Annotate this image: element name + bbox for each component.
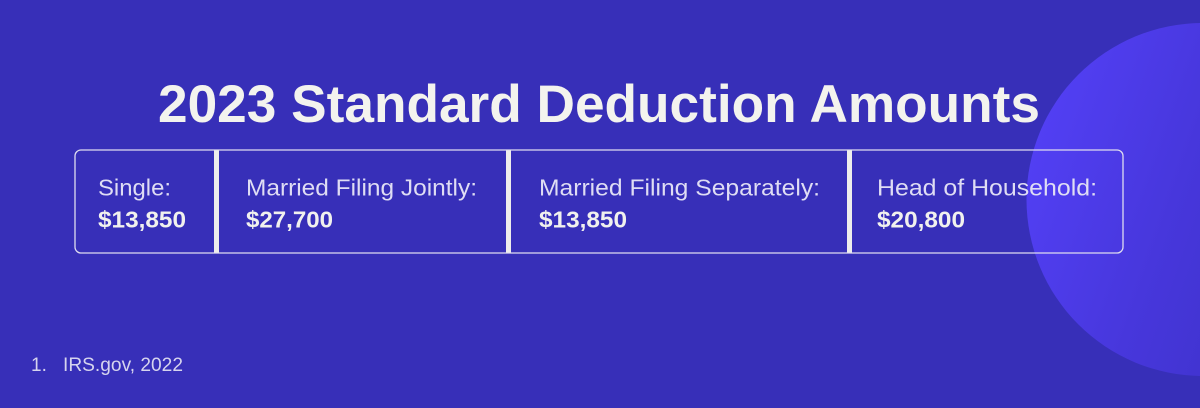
cell: head of household: Head of Household:: [877, 174, 1097, 200]
cell: married filing jointly: $27,700: [246, 206, 333, 232]
table outline: [75, 150, 1123, 253]
footnote: 1.: [31, 355, 47, 376]
cell: head of household: [877, 174, 1097, 232]
cell: single: [98, 174, 186, 232]
cell: single: $13,850: [98, 206, 186, 232]
footnote: IRS.gov, 2022: [63, 355, 183, 376]
cell: married filing jointly: Married Filing Jointly:: [246, 174, 477, 200]
panel: deduction table: [75, 150, 1123, 253]
cell: married filing separately: $13,850: [539, 206, 627, 232]
cell: head of household: $20,800: [877, 206, 965, 232]
cell: single: Single:: [98, 174, 171, 200]
cell: married filing jointly: [246, 174, 477, 232]
cell dividers: [214, 150, 852, 252]
title: 2023 Standard Deduction Amounts: [158, 75, 1040, 134]
cell: married filing separately: Married Filing Separately:: [539, 174, 820, 200]
decorative circle: [1026, 23, 1200, 376]
cell: married filing separately: [539, 174, 820, 232]
